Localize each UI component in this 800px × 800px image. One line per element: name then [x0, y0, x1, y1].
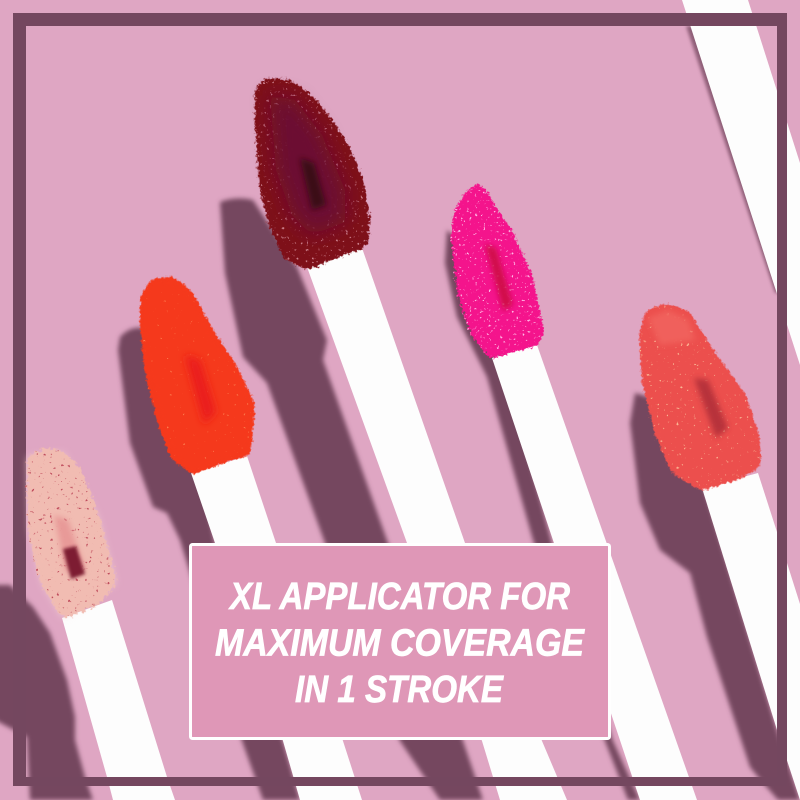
shadow of top right stem [686, 26, 780, 293]
caption box [190, 544, 610, 738]
caption line 1: XL APPLICATOR FOR [228, 576, 570, 618]
applicator tip: nude pink [27, 448, 117, 619]
applicator shadows [0, 198, 800, 800]
caption line 3: IN 1 STROKE [295, 669, 504, 711]
applicator tip: red orange [140, 276, 255, 475]
caption line 2: MAXIMUM COVERAGE [215, 622, 585, 664]
applicator tip: dark burgundy [255, 78, 370, 270]
applicator tip: hot pink [451, 183, 544, 359]
applicator tip: coral [639, 303, 761, 491]
